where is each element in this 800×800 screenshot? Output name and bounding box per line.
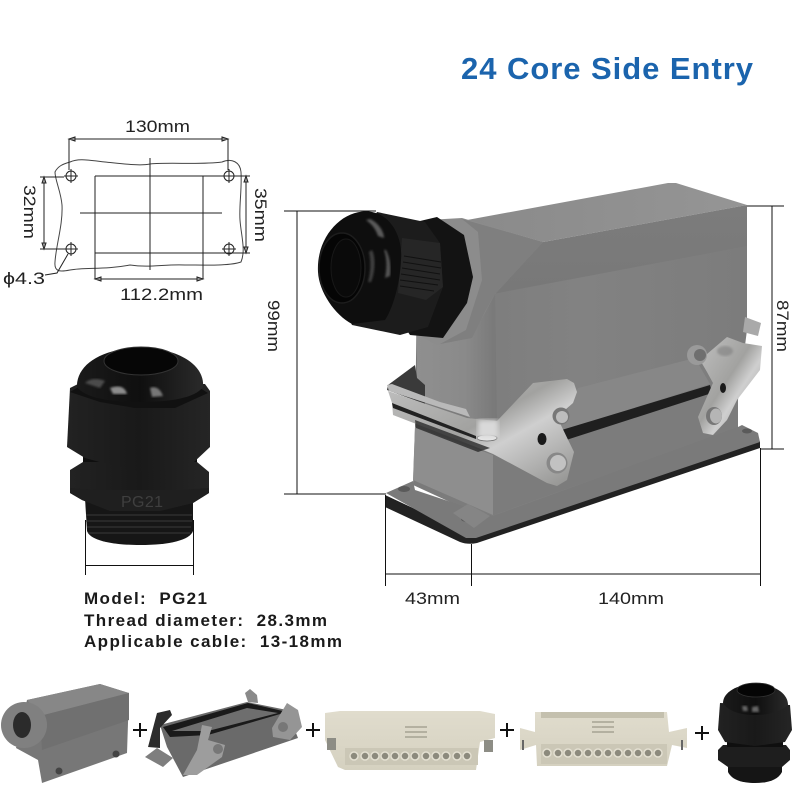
lower housing xyxy=(413,393,738,515)
cable gland PG21 photo xyxy=(67,347,210,545)
parts: hood xyxy=(1,684,129,783)
hole diameter callout: ϕ4.3 xyxy=(3,269,45,288)
99mm height xyxy=(264,211,386,494)
112.2mm dimension xyxy=(95,277,203,304)
gland specifications: Applicable cable: 13-18mm xyxy=(84,632,342,651)
black seal strip xyxy=(555,385,712,442)
87mm height xyxy=(747,206,792,449)
gasket xyxy=(385,441,760,544)
thread xyxy=(85,498,193,545)
technical drawing: mounting cutout xyxy=(3,117,270,304)
plus sign xyxy=(133,723,147,737)
right latch lever xyxy=(687,317,762,435)
left latch lever xyxy=(387,365,577,486)
title: 24 Core Side Entry xyxy=(461,51,754,86)
parts: cable gland xyxy=(718,683,792,783)
99mm height: 99mm xyxy=(264,300,283,352)
gland marking: PG21 xyxy=(121,494,163,511)
43mm depth xyxy=(386,495,472,608)
130mm dimension: 130mm xyxy=(125,117,190,136)
gland specifications xyxy=(84,589,342,651)
plus sign xyxy=(306,723,320,737)
wavy panel outline xyxy=(55,160,243,271)
gland specifications: Thread diameter: 28.3mm xyxy=(84,611,327,630)
35mm dimension: 35mm xyxy=(251,188,270,242)
mounting holes xyxy=(64,169,236,256)
main connector dimensions xyxy=(264,206,792,608)
gland specifications: Model: PG21 xyxy=(84,589,207,608)
dome xyxy=(77,348,203,402)
140mm length xyxy=(472,448,760,608)
parts: male insert xyxy=(325,711,495,770)
thread diameter dimension lines xyxy=(86,520,194,575)
32mm dimension xyxy=(20,177,64,249)
35mm dimension xyxy=(244,176,270,253)
130mm dimension xyxy=(69,117,228,170)
flange nut xyxy=(70,462,209,511)
hood xyxy=(413,183,747,525)
cutout rectangle and centre lines xyxy=(80,158,250,279)
87mm height: 87mm xyxy=(773,300,792,352)
main connector photo xyxy=(318,183,762,544)
parts: female insert xyxy=(520,712,687,766)
32mm dimension: 32mm xyxy=(20,185,39,239)
hole diameter callout xyxy=(3,254,68,288)
plus sign xyxy=(500,723,514,737)
neck xyxy=(83,455,197,475)
hex nut xyxy=(67,384,210,473)
plus sign xyxy=(695,726,709,740)
cable gland on hood xyxy=(318,211,473,338)
140mm length: 140mm xyxy=(598,589,664,608)
112.2mm dimension: 112.2mm xyxy=(120,285,203,304)
43mm depth: 43mm xyxy=(405,589,460,608)
parts: base housing xyxy=(145,689,302,777)
mounting flange xyxy=(386,425,760,538)
